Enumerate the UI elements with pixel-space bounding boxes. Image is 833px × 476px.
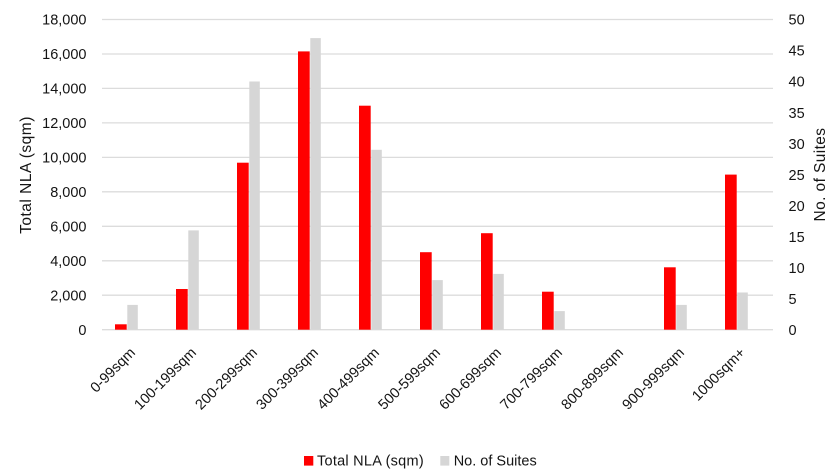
left axis title: Total NLA (sqm) <box>18 116 35 234</box>
category labels: 800-899sqm <box>559 345 627 413</box>
right axis tick labels: 15 <box>788 230 805 246</box>
category labels: 700-799sqm <box>498 345 566 413</box>
series: No. of Suites grey bars <box>127 38 748 330</box>
left axis tick labels: 14,000 <box>42 82 86 98</box>
right axis tick labels: 10 <box>788 261 805 277</box>
category labels: 300-399sqm <box>254 345 322 413</box>
category labels: 400-499sqm <box>315 345 383 413</box>
category labels: 900-999sqm <box>620 345 688 413</box>
left axis tick labels: 18,000 <box>42 13 86 29</box>
left axis tick labels: 6,000 <box>50 220 86 236</box>
legend <box>304 454 537 470</box>
right axis tick labels: 50 <box>788 13 805 29</box>
series: Total NLA (sqm) red bars <box>115 51 737 330</box>
left axis tick labels: 2,000 <box>50 288 86 304</box>
right axis tick labels: 0 <box>788 323 797 339</box>
category labels: 0-99sqm <box>88 345 139 396</box>
left axis tick labels: 12,000 <box>42 116 86 132</box>
right axis tick labels: 5 <box>788 292 797 308</box>
right axis tick labels <box>788 13 805 339</box>
right axis tick labels: 35 <box>788 106 805 122</box>
left axis tick labels <box>42 13 86 339</box>
right axis tick labels: 30 <box>788 137 805 153</box>
legend: No. of Suites <box>454 454 537 470</box>
left axis tick labels: 16,000 <box>42 47 86 63</box>
left axis tick labels: 0 <box>78 323 86 339</box>
category labels: 1000sqm+ <box>689 345 749 405</box>
right axis tick labels: 20 <box>788 199 805 215</box>
left axis tick labels: 4,000 <box>50 254 86 270</box>
right axis tick labels: 40 <box>788 75 805 91</box>
left axis tick labels: 10,000 <box>42 151 86 167</box>
left axis tick labels: 8,000 <box>50 185 86 201</box>
category labels <box>88 345 749 413</box>
category labels: 100-199sqm <box>132 345 200 413</box>
right axis tick labels: 45 <box>788 44 805 60</box>
right axis title: No. of Suites <box>812 128 829 221</box>
category labels: 500-599sqm <box>376 345 444 413</box>
right axis tick labels: 25 <box>788 168 805 184</box>
category labels: 600-699sqm <box>437 345 505 413</box>
legend: Total NLA (sqm) <box>317 454 424 470</box>
category labels: 200-299sqm <box>193 345 261 413</box>
